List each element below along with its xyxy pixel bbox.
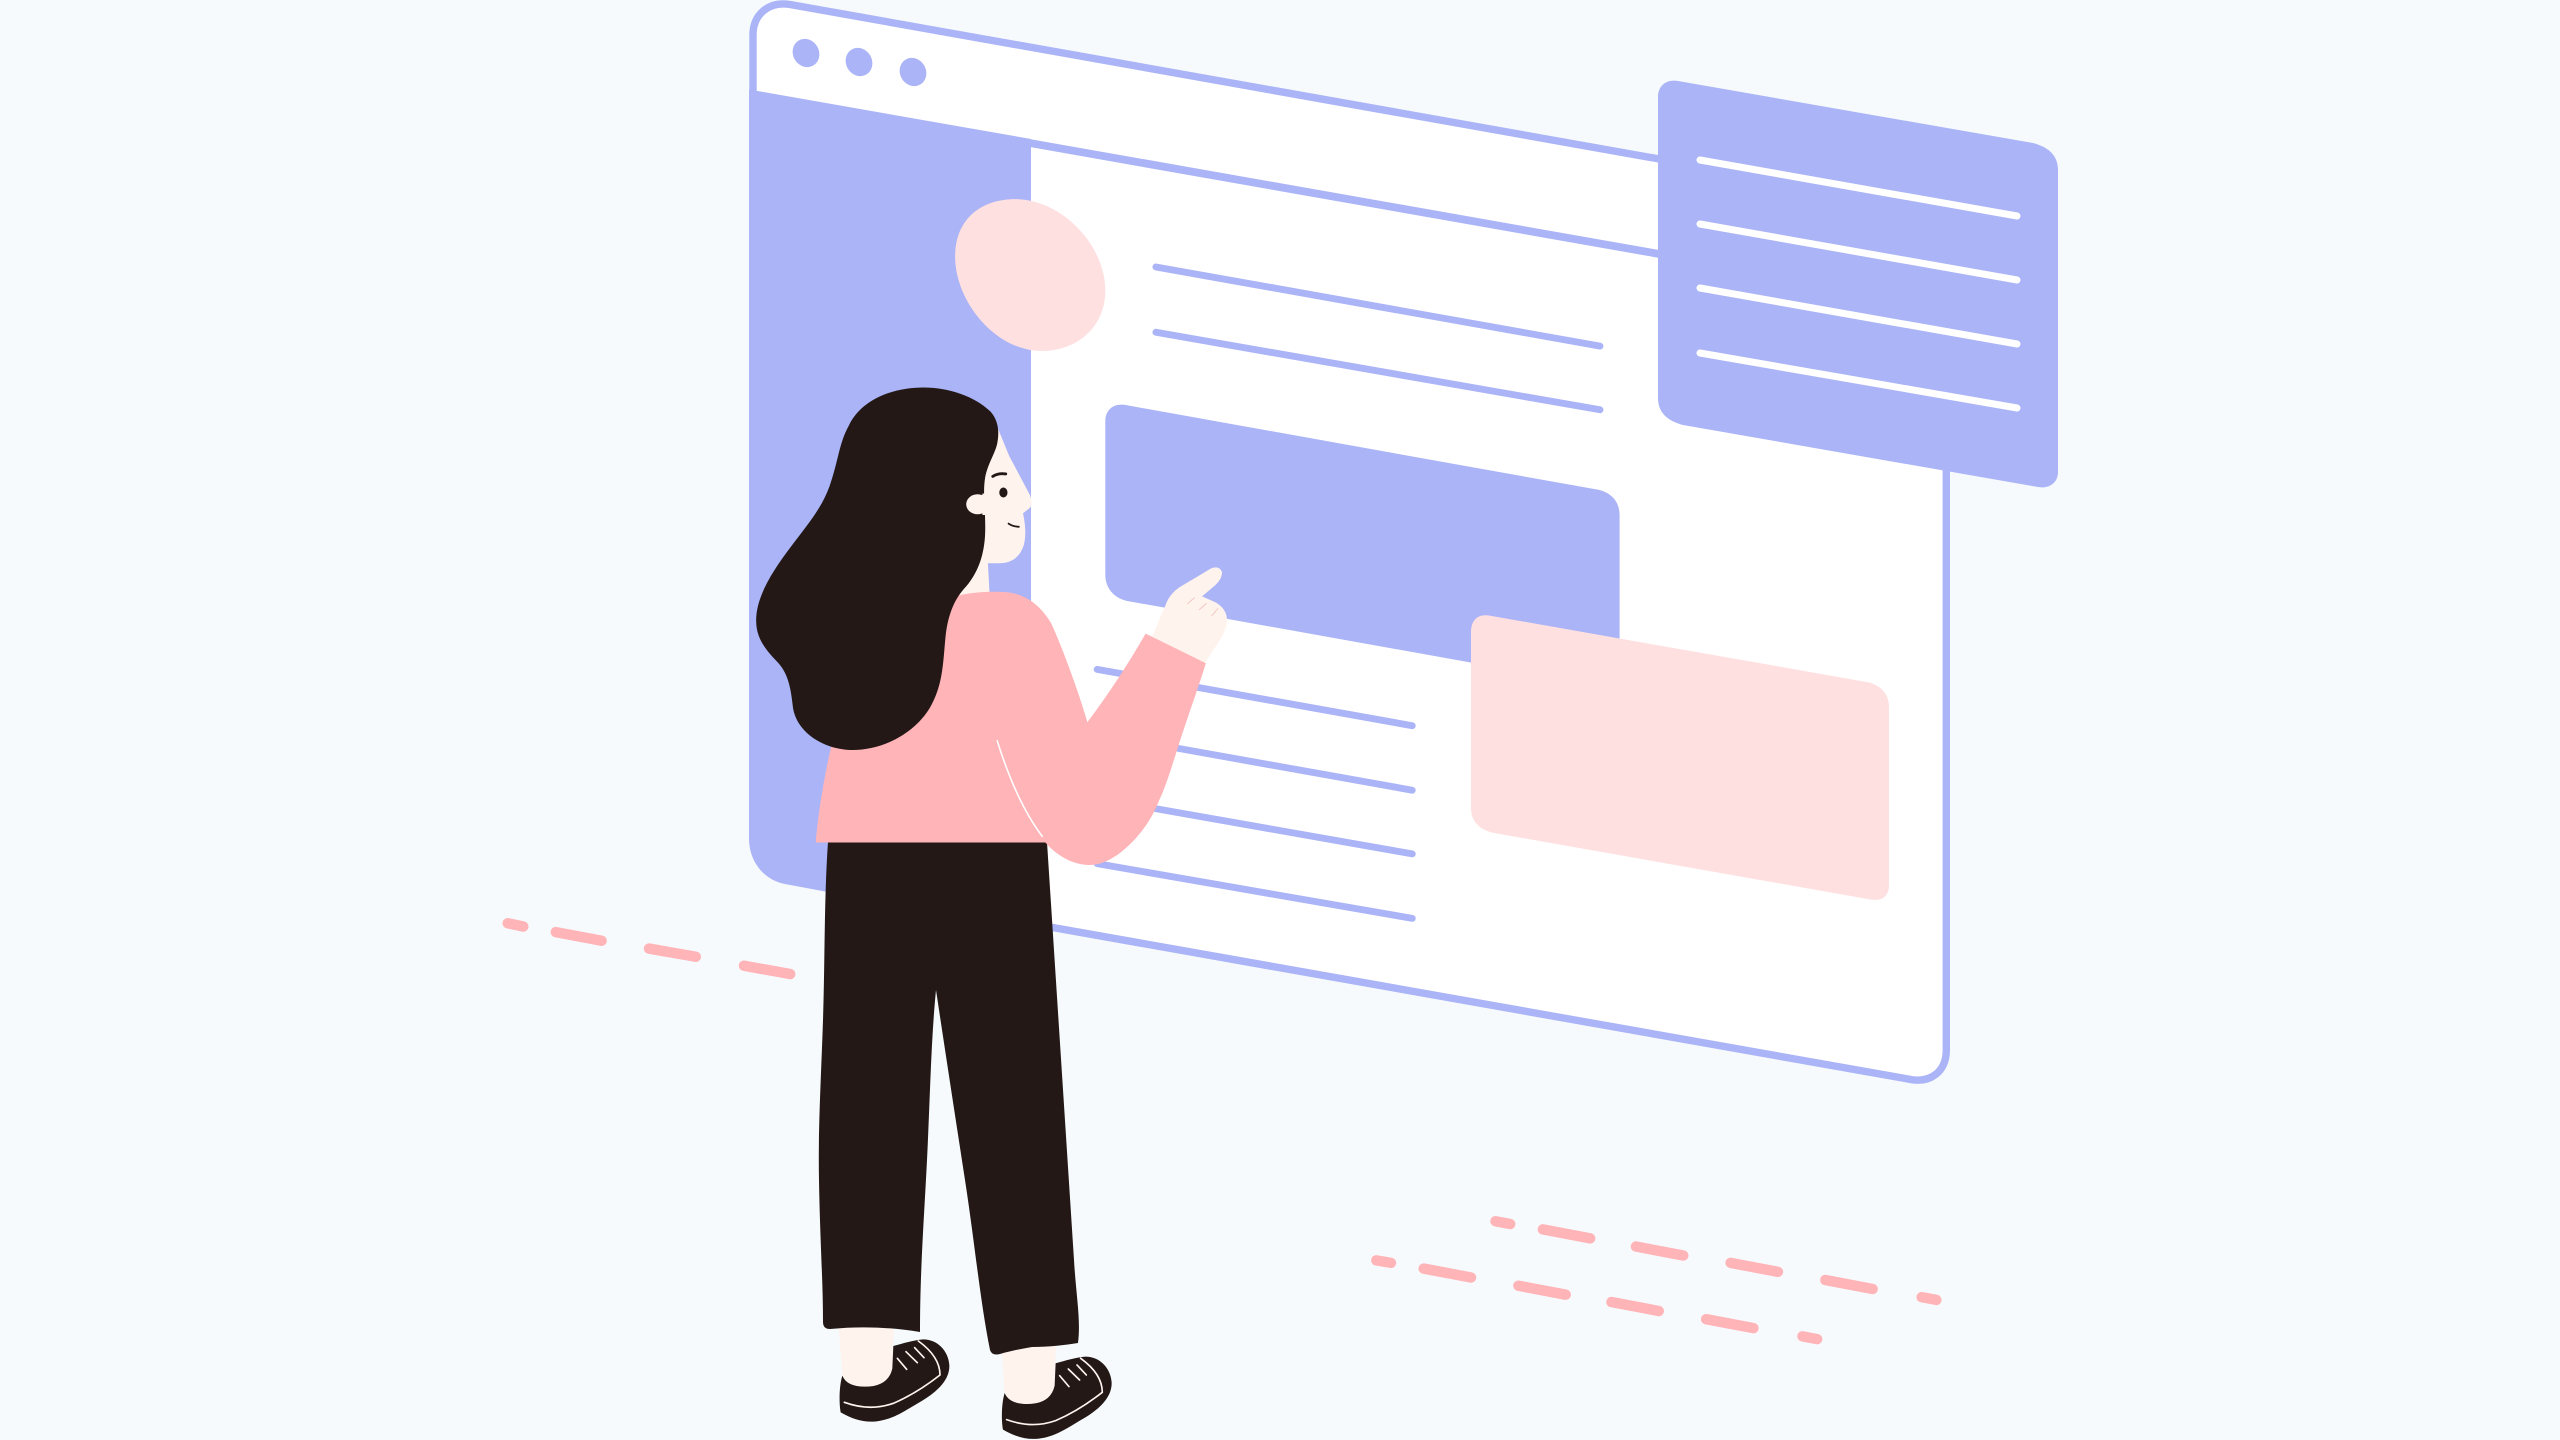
eye [999, 487, 1008, 497]
window dots [787, 34, 932, 91]
floating menu panel [1658, 81, 2058, 487]
head, arm and torso [756, 387, 1227, 865]
right shoe [1002, 1357, 1112, 1439]
window sidebar [749, 90, 1031, 930]
woman figure [756, 387, 1227, 1439]
trousers [819, 842, 1079, 1354]
blue content card [1105, 405, 1620, 663]
eyebrow [993, 474, 1006, 476]
left shoe stitching [844, 1341, 940, 1407]
finger creases [1188, 598, 1218, 616]
window content [508, 199, 1936, 1339]
ear [966, 494, 989, 514]
right foot [1001, 1334, 1112, 1439]
menu lines [1700, 160, 2017, 408]
face and neck [954, 429, 1032, 601]
left shoe [840, 1339, 949, 1422]
pink content card [1471, 615, 1889, 900]
pink avatar blob [955, 199, 1105, 351]
cheek edge [982, 494, 988, 515]
left foot [838, 1323, 949, 1422]
content top rule [1025, 142, 1665, 255]
dashes: lower right front [1376, 1260, 1817, 1339]
body text lines [1097, 669, 1412, 918]
sweater [816, 592, 1206, 865]
mouth [1009, 524, 1019, 527]
left ankle [838, 1323, 894, 1387]
sleeve crease [997, 741, 1042, 836]
right shoe stitching [1007, 1358, 1102, 1425]
heading text lines [1156, 267, 1600, 410]
browser window frame [753, 4, 1946, 1080]
dashes: left [508, 923, 790, 974]
hand [1152, 567, 1227, 665]
hair [756, 387, 998, 750]
dashes: lower right back [1496, 1221, 1936, 1300]
right ankle [1001, 1334, 1056, 1404]
